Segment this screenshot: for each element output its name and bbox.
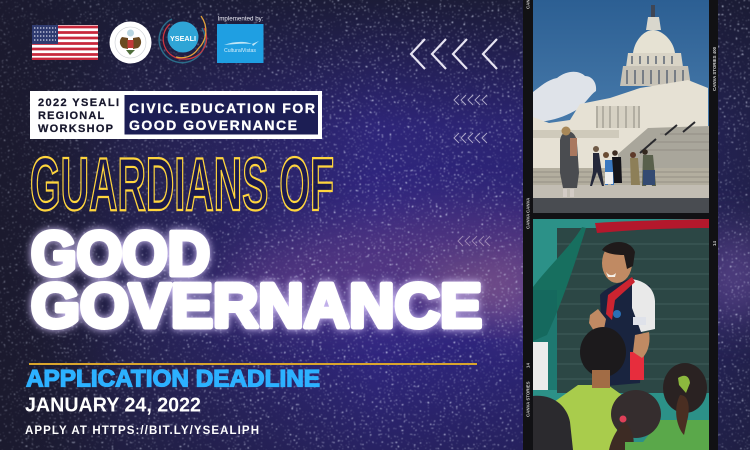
icon: YSEALI logo (159, 16, 207, 63)
title: Good Governance: GOVERNANCE (31, 272, 482, 341)
film strip captions: CANVA (526, 197, 530, 213)
decorative chevrons large (411, 39, 497, 69)
deadline heading: APPLICATION DEADLINE (26, 366, 320, 392)
title: Guardians of: GUARDIANS OF (30, 142, 334, 226)
badge: workshop label: 2022 YSEALI (38, 97, 119, 109)
badge: workshop topic: CIVIC.EDUCATION FOR (129, 100, 315, 116)
film strip (523, 0, 718, 450)
plaza (533, 185, 709, 199)
Capitol building (533, 80, 708, 168)
icon: CulturalVistas logo (217, 24, 264, 63)
chalkboard (557, 228, 709, 393)
title: Good Governance (31, 220, 482, 341)
icon: YSEALI logo: YSEALI (170, 34, 196, 43)
label: implemented by: Implemented by: (218, 16, 264, 22)
Capitol steps (618, 126, 709, 170)
film strip captions: CANVA (526, 213, 530, 229)
Capitol dome (620, 5, 691, 86)
application link: APPLY AT HTTPS://BIT.LY/YSEALIPH (25, 425, 259, 437)
film strip captions: 14 (526, 363, 530, 368)
photo: US Capitol (533, 0, 709, 223)
badge: workshop topic: GOOD GOVERNANCE (129, 117, 297, 133)
title: Good Governance: GOOD (31, 220, 210, 289)
cloud (533, 72, 596, 121)
film strip captions: 14 (712, 241, 717, 246)
badge: workshop label: REGIONAL (38, 110, 104, 122)
decorative chevrons small lower (458, 236, 490, 246)
icon: embassy seal (110, 22, 152, 64)
teacher (589, 242, 655, 386)
film strip captions (526, 0, 717, 417)
workshop badge (30, 91, 322, 139)
deadline date: JANUARY 24, 2022 (25, 394, 201, 416)
decorative chevrons small middle (454, 133, 487, 143)
badge: workshop label: WORKSHOP (38, 123, 113, 135)
film strip captions: CANVA STORIES (526, 381, 530, 417)
decorative chevrons small top (454, 95, 487, 105)
film strip captions: CANVA STORIES 400 (712, 46, 717, 91)
icon: CulturalVistas logo: CulturalVistas (224, 48, 257, 54)
gold divider (29, 363, 477, 365)
icon: US flag (32, 25, 98, 60)
photo: teacher in classroom (533, 219, 709, 450)
students (533, 327, 709, 450)
logo row (32, 16, 264, 64)
standing visitors (560, 126, 656, 197)
green curtain (533, 227, 586, 341)
red tinsel (595, 219, 709, 233)
